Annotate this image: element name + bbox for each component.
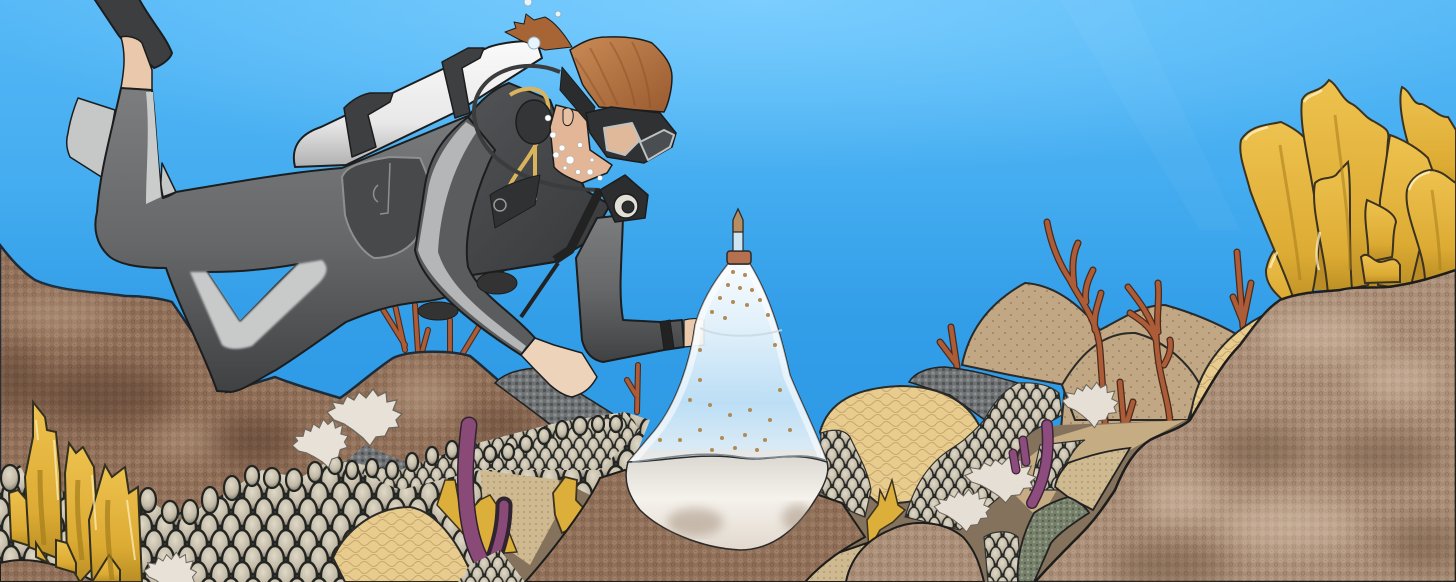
near arm stripe xyxy=(418,122,526,352)
ear xyxy=(563,108,573,126)
gray fuzzy coral: right xyxy=(909,367,1020,420)
yellow hoses xyxy=(510,89,548,200)
brown rock: large left xyxy=(0,245,558,520)
striped brain coral: upper right xyxy=(1190,312,1300,420)
far hand xyxy=(684,318,704,347)
rising bubbles xyxy=(524,0,561,49)
suit stripe: shin xyxy=(190,260,326,349)
brown rocks: bottom centre xyxy=(804,523,984,582)
bag: lower water-filled xyxy=(626,456,828,550)
yellow coral: centre right xyxy=(867,480,905,550)
weight pouch xyxy=(477,272,517,294)
BCD pocket xyxy=(342,157,430,258)
lower pouch xyxy=(418,302,458,320)
chest xyxy=(420,83,610,280)
purple tube sponges: left xyxy=(465,425,504,560)
air tank xyxy=(294,41,542,167)
hoses xyxy=(474,66,600,190)
collection vial xyxy=(733,209,743,251)
tan boulder corals xyxy=(962,283,1238,450)
brown rock: bottom left xyxy=(0,560,95,582)
near hand xyxy=(521,338,597,397)
tan and green encrusting corals xyxy=(1018,448,1130,582)
fin: lower gray xyxy=(67,98,176,198)
brown rock: large right xyxy=(1035,270,1456,582)
sea rods: right main xyxy=(1047,222,1171,450)
scuba diver xyxy=(67,0,704,397)
yellow fan corals: upper right xyxy=(1240,80,1456,320)
bag collar xyxy=(727,251,751,264)
purple tube sponges: right xyxy=(1013,425,1048,503)
bag: white edges xyxy=(628,264,827,462)
water line xyxy=(632,454,825,462)
cobble coral: under purple tube xyxy=(458,550,525,582)
far arm xyxy=(576,215,684,362)
white corals: left xyxy=(144,389,402,582)
white corals: right xyxy=(934,382,1118,532)
gray fuzzy coral: left xyxy=(335,368,622,490)
yellow coral: small centre xyxy=(553,477,592,533)
face xyxy=(550,105,612,183)
bag fold xyxy=(700,328,782,336)
sand patch behind right reef xyxy=(1000,420,1185,520)
background sea rods: right xyxy=(940,252,1251,367)
near arm xyxy=(415,117,535,355)
wetsuit legs and torso xyxy=(95,88,560,392)
back hair xyxy=(505,14,572,50)
reef floor backing xyxy=(0,420,1190,582)
tank straps xyxy=(344,48,484,157)
sand patch: left xyxy=(478,470,565,565)
foot skin xyxy=(121,36,152,90)
hair xyxy=(570,37,672,112)
mask lens xyxy=(604,123,674,160)
shoulder pad xyxy=(516,100,552,144)
brain coral: right centre xyxy=(820,386,982,505)
brown rock: under collection bag xyxy=(525,470,865,582)
air bubbles: face xyxy=(545,115,602,180)
collection tent bag xyxy=(626,209,828,550)
vial cap xyxy=(733,209,743,232)
cobble corals: right xyxy=(819,383,1085,582)
regulator xyxy=(600,175,648,222)
brain coral: bottom left xyxy=(333,507,475,582)
mask strap xyxy=(560,67,595,125)
yellow coral: behind purple tube xyxy=(437,480,517,555)
bag shadows xyxy=(667,504,814,536)
regulator hose xyxy=(555,190,600,260)
cobble coral field: left xyxy=(0,412,650,582)
dive mask xyxy=(586,107,676,163)
wrist band xyxy=(660,320,674,350)
bag: upper translucent xyxy=(628,264,827,462)
background sea rods: left xyxy=(382,305,638,412)
suit stripe: calf xyxy=(146,92,161,204)
coral spawn dots xyxy=(658,270,792,452)
yellow coral: bottom left xyxy=(9,402,142,582)
fin: raised foot xyxy=(93,0,172,68)
rod xyxy=(521,263,558,317)
gauges xyxy=(490,175,540,228)
